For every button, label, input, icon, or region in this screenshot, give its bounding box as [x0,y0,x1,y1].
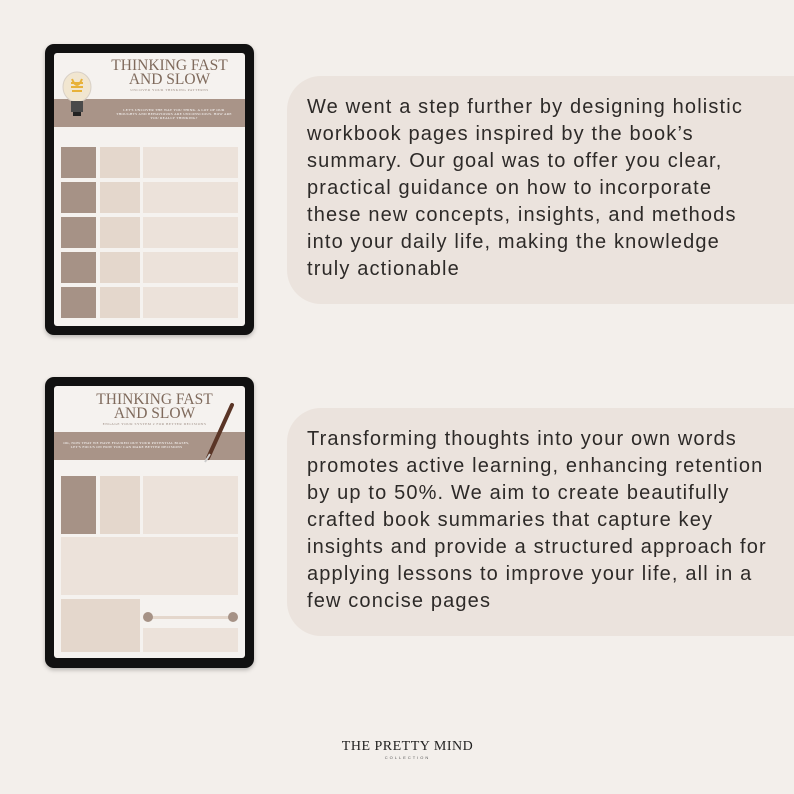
panel: description 2: applying lessons to improve your life, all in a [307,563,752,585]
title 1: UNCOVER YOUR THINKING PATTERNS [130,88,209,92]
screen 2 [54,386,245,658]
panel: description 2 [287,408,794,636]
header band 1 [54,99,245,127]
icon: light bulb [62,72,92,116]
panel: description 1 [287,76,794,304]
brand logo: COLLECTION [385,755,430,760]
panel: description 1: these new concepts, insights, and methods [307,204,737,226]
title 2: AND SLOW [114,405,195,422]
tablet 1: workbook page [45,44,254,335]
brand logo: THE PRETTY MIND [342,739,473,754]
screen 1 [54,53,245,326]
header band 2 [54,432,245,460]
title 2: THINKING FAST [96,391,213,408]
panel: description 2: by up to 50%. We aim to create beautifully [307,482,730,504]
title 2 [96,391,213,426]
panel: description 2: Transforming thoughts into your own words [307,428,737,450]
panel: description 1: into your daily life, making the knowledge [307,231,720,253]
panel: description 1: truly actionable [307,258,460,280]
panel: description 1: workbook pages inspired by the book’s [307,123,694,145]
panel: description 2: crafted book summaries that capture key [307,509,713,531]
panel: description 2: insights and provide a structured approach for [307,536,767,558]
rows table [61,147,238,318]
boxes [61,476,238,652]
panel: description 2: promotes active learning, enhancing retention [307,455,763,477]
tablet 2: decisions page [45,377,254,668]
panel: description 2: few concise pages [307,590,491,612]
title 1: AND SLOW [129,71,210,88]
panel: description 1: summary. Our goal was to offer you clear, [307,150,722,172]
title 2: ENGAGE YOUR SYSTEM 2 FOR BETTER DECISIONS [103,422,206,426]
title 1: THINKING FAST [111,57,228,74]
title 1 [111,57,228,92]
header band 1: LET'S UNCOVER THE WAY YOU THINK. A LOT OF OUR THOUGHTS AND BEHAVIOURS ARE UNCONSCIOUS. HOW ARE YOU REALLY THINKING? [116,108,232,120]
icon: pen [204,402,234,462]
header band 2: OK, NOW THAT WE HAVE FIGURED OUT YOUR POTENTIAL BIASES, LET'S FOCUS ON HOW YOU CAN MAKE BETTER DECISIONS [63,441,190,449]
panel: description 1: practical guidance on how to incorporate [307,177,712,199]
panel: description 1: We went a step further by designing holistic [307,96,743,118]
